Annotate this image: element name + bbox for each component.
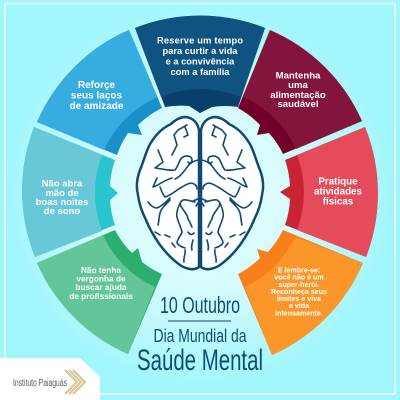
- text: family time: com a família: [171, 67, 230, 77]
- panel: physical activity: [280, 127, 378, 257]
- panel: friendship: [37, 30, 162, 155]
- text: not a superhero: E lembre-se:: [278, 266, 320, 274]
- title: date: 10 Outubro: [160, 292, 240, 318]
- text: family time: Reserve um tempo: [157, 36, 243, 46]
- text: physical activity: Pratique: [318, 176, 358, 188]
- title: event name: Dia Mundial da: [154, 325, 247, 346]
- text: professional help: buscar ajuda: [75, 282, 127, 292]
- text: professional help: Não tenha: [81, 265, 121, 275]
- text: not a superhero: super-herói.: [278, 281, 320, 289]
- text: sleep: de sono: [44, 206, 80, 217]
- panel: family time: [135, 16, 265, 113]
- text: healthy food: uma: [288, 80, 309, 91]
- icon: brain: [137, 117, 263, 269]
- text: healthy food: alimentação: [270, 90, 326, 101]
- divider line: [168, 320, 231, 322]
- text: friendship: seus laços: [71, 90, 123, 102]
- text: sleep: boas noites: [36, 197, 88, 208]
- text: not a superhero: intensamente.: [275, 310, 323, 318]
- text: not a superhero: Reconheça seus: [271, 288, 327, 296]
- text: not a superhero: limites e viva: [277, 295, 321, 303]
- text: professional help: de profissionais: [69, 291, 133, 301]
- panel: not a superhero: [238, 230, 363, 355]
- logo: Instituto Paiaguás: Instituto Paiaguás: [13, 378, 67, 389]
- text: physical activity: físicas: [323, 196, 354, 208]
- text: physical activity: atividades: [314, 186, 363, 198]
- text: healthy food: Mantenha: [276, 70, 321, 82]
- text: family time: e a convivência: [166, 56, 235, 66]
- text: family time: para curtir a vida: [163, 46, 238, 56]
- title: mental health: Saúde Mental: [137, 344, 263, 377]
- text: healthy food: saudável: [277, 99, 319, 110]
- text: not a superhero: você não é um: [274, 274, 324, 282]
- text: sleep: mão de: [45, 188, 79, 199]
- text: friendship: de amizade: [70, 101, 124, 112]
- panel: professional help: [37, 230, 162, 354]
- text: sleep: Não abra: [42, 178, 83, 190]
- text: friendship: Reforçe: [78, 80, 116, 91]
- text: not a superhero: a vida: [289, 302, 309, 310]
- text: professional help: vergonha de: [76, 274, 126, 284]
- logo: Instituto Paiaguás: [0, 358, 100, 400]
- panel: sleep: [22, 127, 118, 257]
- panel: healthy food: [238, 30, 362, 154]
